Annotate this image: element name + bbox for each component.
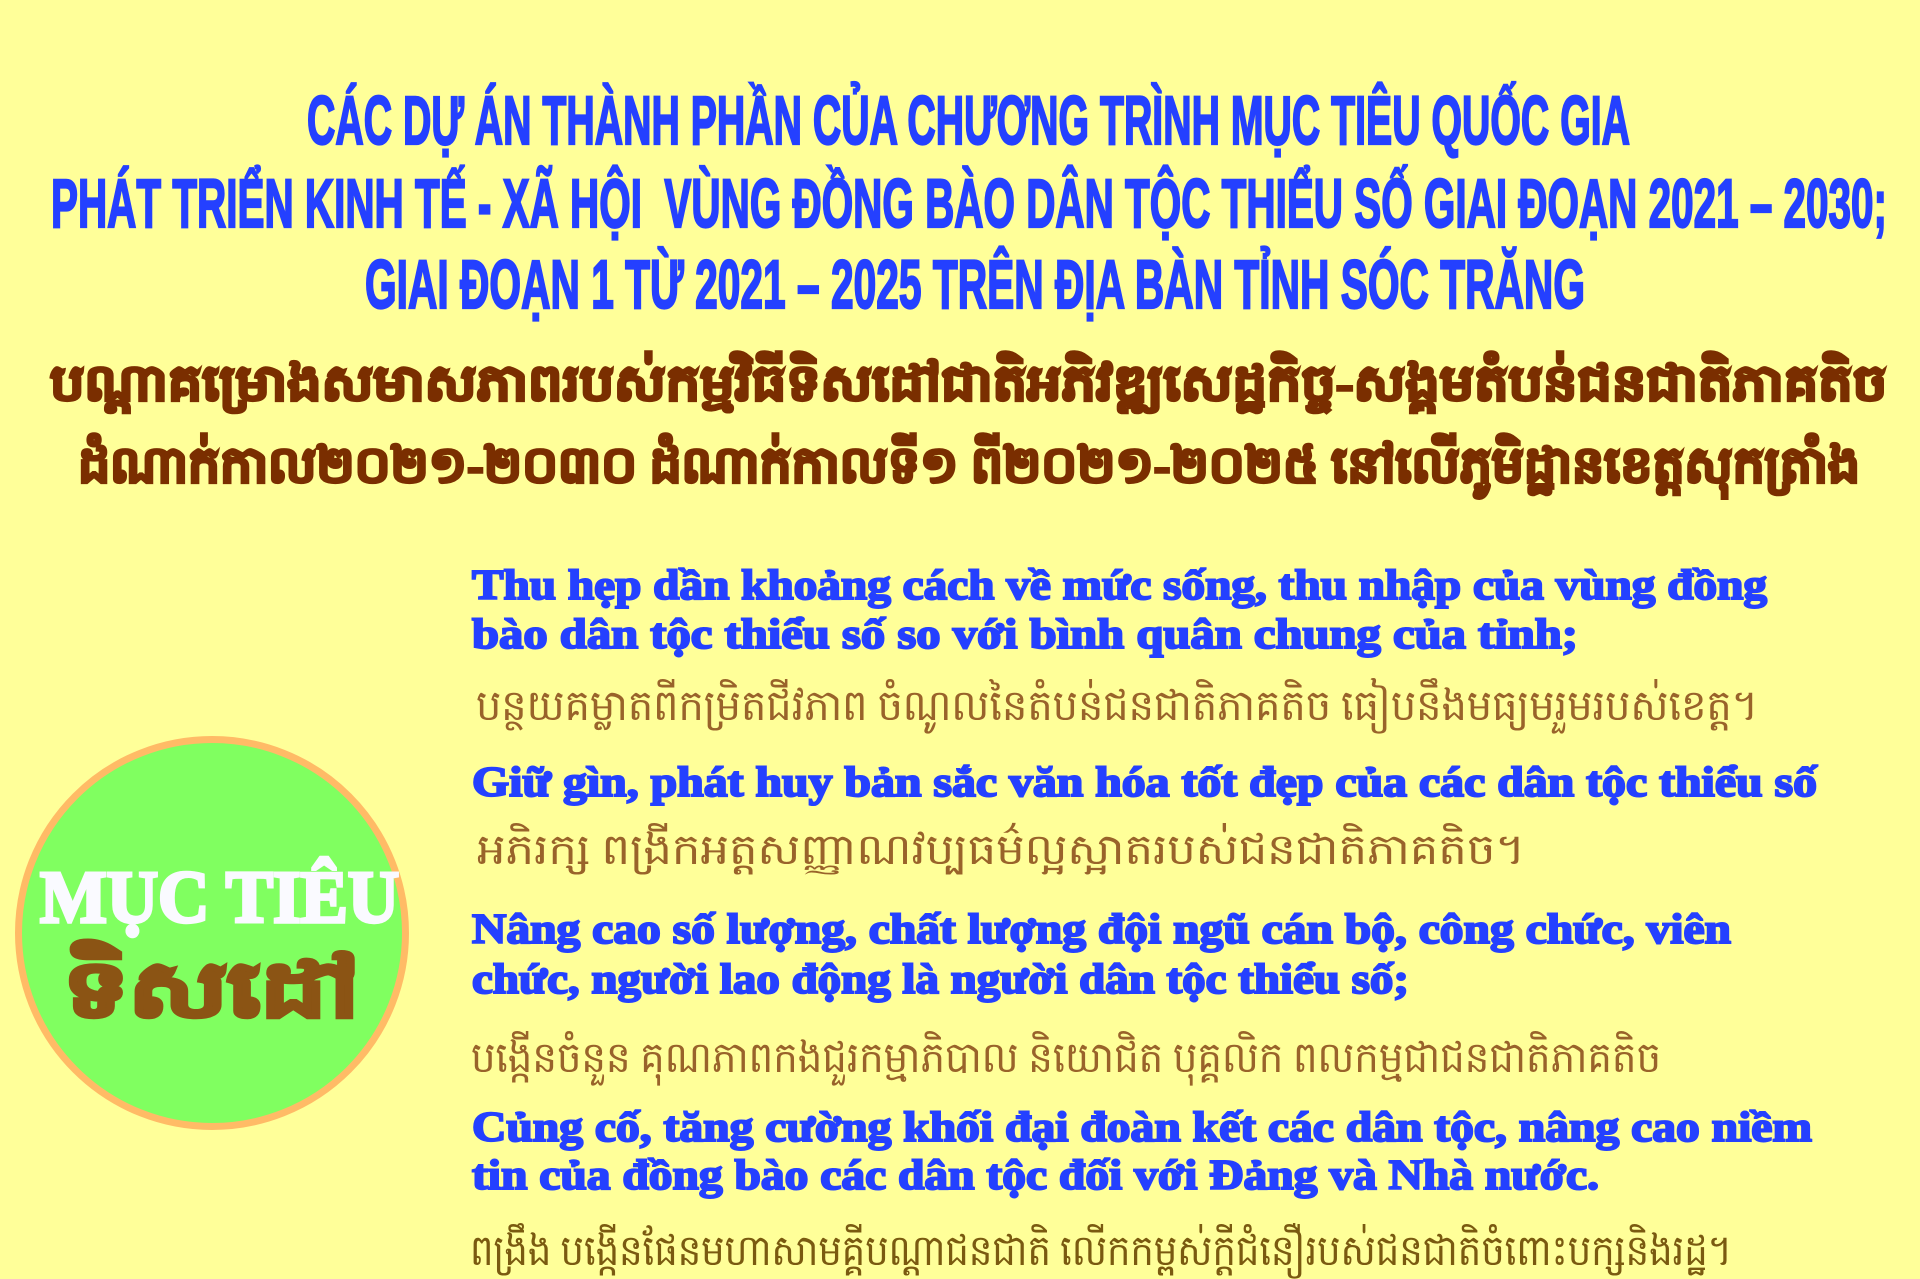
title: Khmer heading: ដំណាក់កាល២០២១-២០៣០ ដំណាក់កាលទី១ ពី២០២១-២០២៥ នៅលើភូមិដ្ឋានខេត្តសុកត្រាំង (78, 433, 1860, 499)
objective 2: Khmer text: អភិរក្ស ពង្រីកអត្តសញ្ញាណវប្បធម៌ល្អស្អាតរបស់ជនជាតិភាគតិច។ (477, 822, 1525, 875)
title: Khmer heading: បណ្តាគម្រោងសមាសភាពរបស់កម្មវិធីទិសដៅជាតិអភិវឌ្ឍសេដ្ឋកិច្ច-សង្គមតំបន់ជនជាតិភាគតិច (50, 351, 1887, 414)
objective 4: Khmer text: ពង្រឹង បង្កើនផែនមហាសាមគ្គីបណ្តាជនជាតិ លើកកម្ពស់ក្តីជំនឿរបស់ជនជាតិចំពោះបក្សនិងរដ្ឋ។ (470, 1223, 1732, 1279)
objective 1: Vietnamese text: Thu hẹp dần khoảng cách về mức sống, thu nhập của vùng đồng (472, 563, 1767, 609)
objective 1: Vietnamese text (472, 563, 1767, 658)
objective 3: Vietnamese text (472, 907, 1731, 1003)
objective 1: Khmer text: បន្ថយគម្លាតពីកម្រិតជីវភាព ចំណូលនៃតំបន់ជនជាតិភាគតិច ធៀបនឹងមធ្យមរួមរបស់ខេត្ត។ (476, 678, 1758, 734)
title: Khmer heading (50, 351, 1887, 499)
objective 3: Vietnamese text: Nâng cao số lượng, chất lượng đội ngũ cán bộ, công chức, viên (472, 907, 1731, 953)
badge: objectives circle (18, 740, 406, 1126)
objective 2: Vietnamese text: Giữ gìn, phát huy bản sắc văn hóa tốt đẹp của các dân tộc thiểu số (472, 760, 1818, 806)
objective 4: Vietnamese text: Củng cố, tăng cường khối đại đoàn kết các dân tộc, nâng cao niềm (472, 1105, 1812, 1151)
badge: objectives circle: MỤC TIÊU (40, 857, 399, 939)
title: Vietnamese heading (51, 82, 1887, 323)
objective 3: Vietnamese text: chức, người lao động là người dân tộc thiểu số; (472, 957, 1409, 1003)
objective 1: Vietnamese text: bào dân tộc thiểu số so với bình quân chung của tỉnh; (472, 612, 1578, 658)
badge: objectives circle: ទិសដៅ (63, 940, 359, 1033)
objective 4: Vietnamese text (472, 1105, 1812, 1199)
objective 4: Vietnamese text: tin của đồng bào các dân tộc đối với Đảng và Nhà nước. (472, 1153, 1599, 1199)
objective 3: Khmer text: បង្កើនចំនួន គុណភាពកងជួរកម្មាភិបាល និយោជិត បុគ្គលិក ពលកម្មជាជនជាតិភាគតិច (471, 1031, 1661, 1086)
